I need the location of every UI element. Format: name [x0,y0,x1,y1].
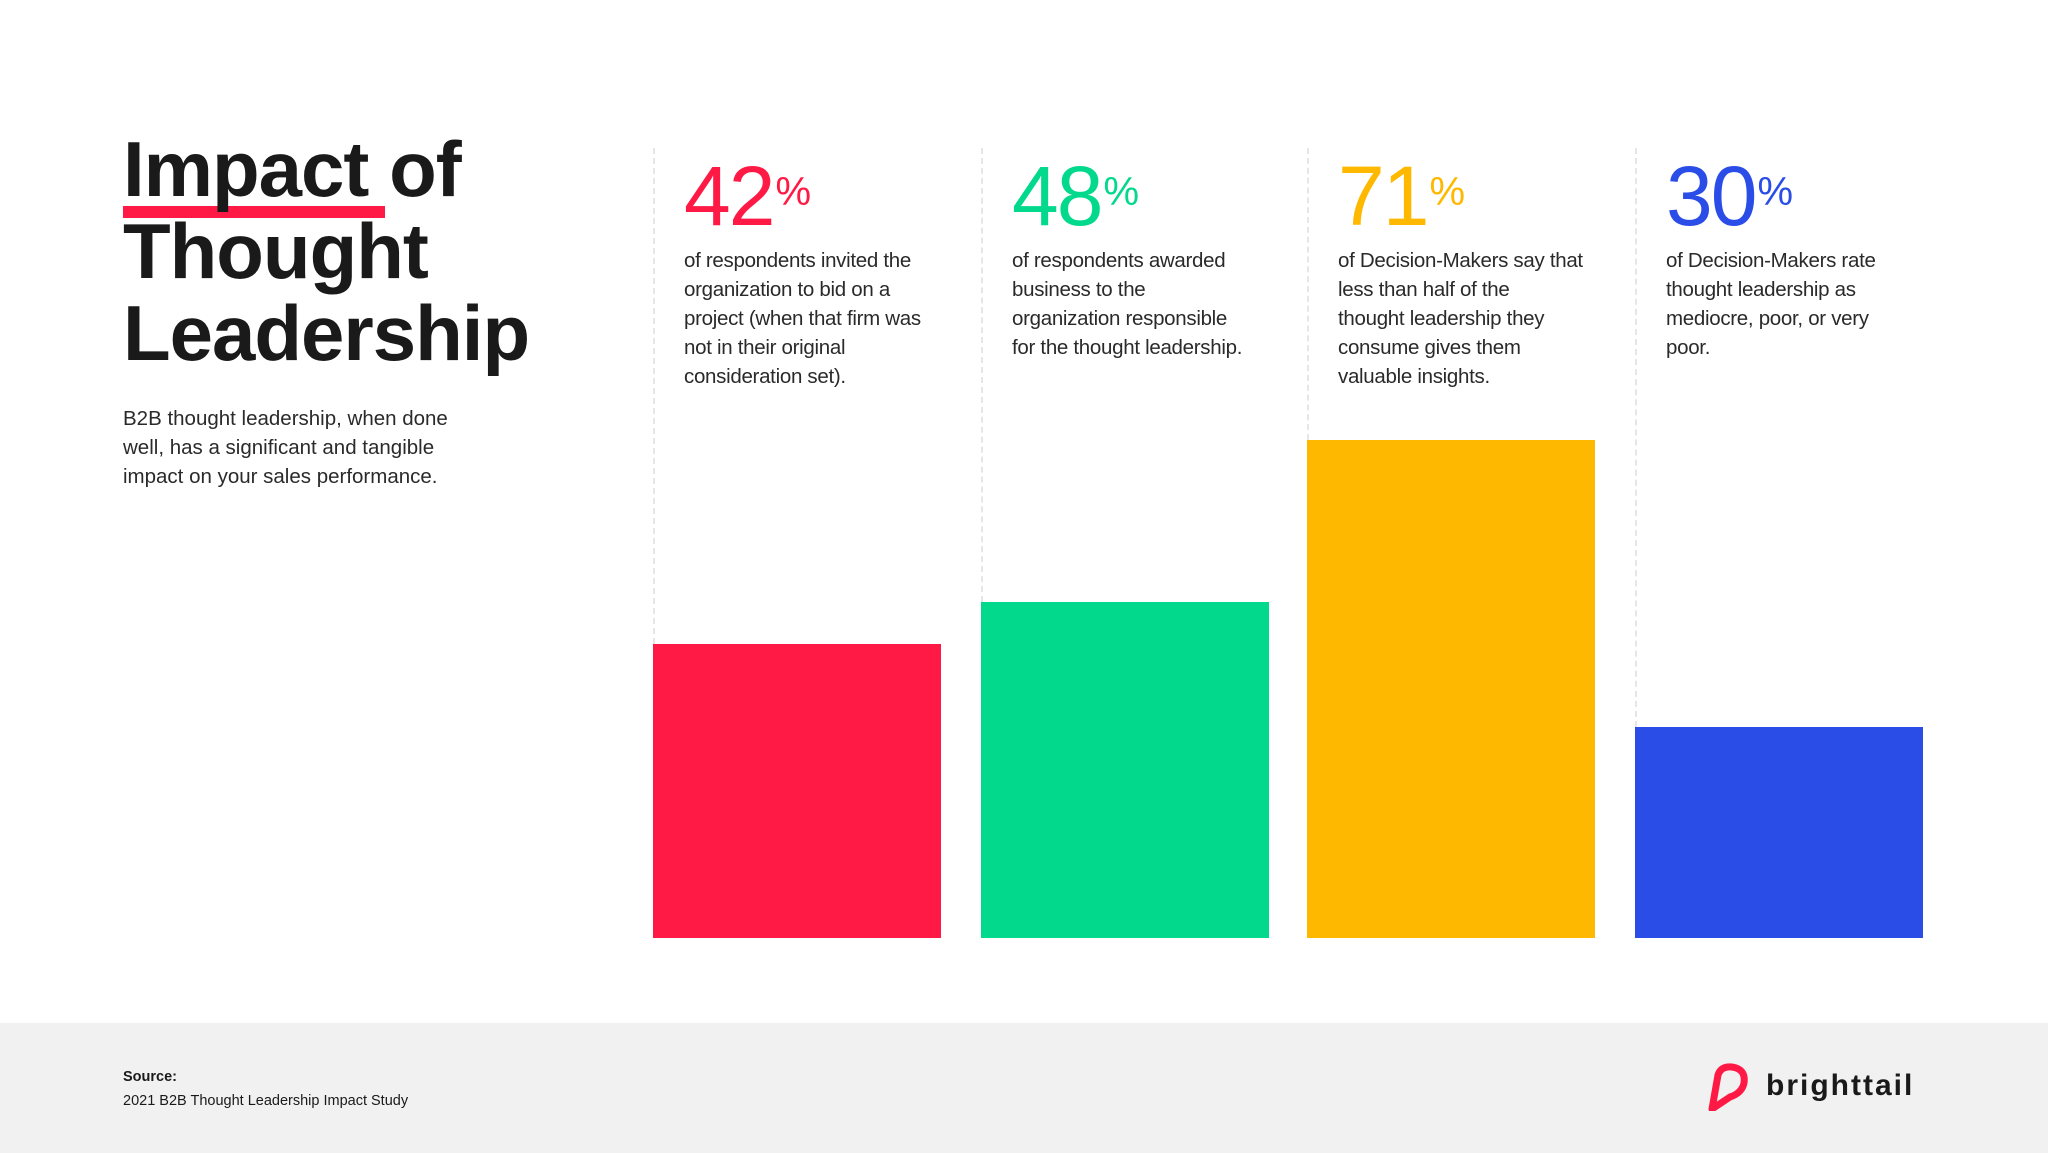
stat 48%: 48% [1012,149,1139,243]
logo: brighttail [1708,1063,1914,1111]
bar blue [1635,727,1923,938]
column 4: 30% [1666,149,1876,359]
bar green [981,602,1269,938]
stat 30%: 30% [1666,149,1793,243]
description 1: of respondents invited the [684,249,911,272]
subtitle: impact on your sales performance. [123,465,437,488]
description 4 [1666,249,1876,359]
title [123,125,529,377]
description 1: consideration set). [684,365,846,388]
title: of [389,125,461,213]
bar red [653,644,941,938]
source: 2021 B2B Thought Leadership Impact Study [123,1093,408,1109]
column 3: 71% [1338,149,1583,388]
source [123,1069,408,1109]
title: Thought [123,207,428,295]
description 3 [1338,249,1583,388]
description 2: for the thought leadership. [1012,336,1242,359]
description 2 [1012,249,1242,359]
stat 42%: 42% [684,149,811,243]
subtitle: B2B thought leadership, when done [123,407,448,430]
stat 71%: 71% [1338,149,1465,243]
description 2: business to the [1012,278,1145,301]
footer [0,1023,2048,1153]
column 2: 48% [1012,149,1242,359]
icon: logo mark [1708,1063,1748,1111]
description 1 [684,249,921,388]
description 3: less than half of the [1338,278,1509,301]
description 3: thought leadership they [1338,307,1544,330]
description 4: thought leadership as [1666,278,1856,301]
description 1: not in their original [684,336,845,359]
description 2: organization responsible [1012,307,1227,330]
title: Leadership [123,289,529,377]
description 1: organization to bid on a [684,278,890,301]
column 1: 42% [684,149,921,388]
description 3: consume gives them [1338,336,1521,359]
description 2: of respondents awarded [1012,249,1225,272]
description 4: of Decision-Makers rate [1666,249,1876,272]
description 1: project (when that firm was [684,307,921,330]
description 4: poor. [1666,336,1710,359]
logo text: brighttail [1766,1069,1914,1102]
description 4: mediocre, poor, or very [1666,307,1869,330]
description 3: of Decision-Makers say that [1338,249,1583,272]
source: Source: [123,1069,177,1085]
bar yellow [1307,440,1595,938]
subtitle [123,407,448,488]
subtitle: well, has a significant and tangible [123,436,434,459]
title: Impact [123,125,368,213]
description 3: valuable insights. [1338,365,1490,388]
